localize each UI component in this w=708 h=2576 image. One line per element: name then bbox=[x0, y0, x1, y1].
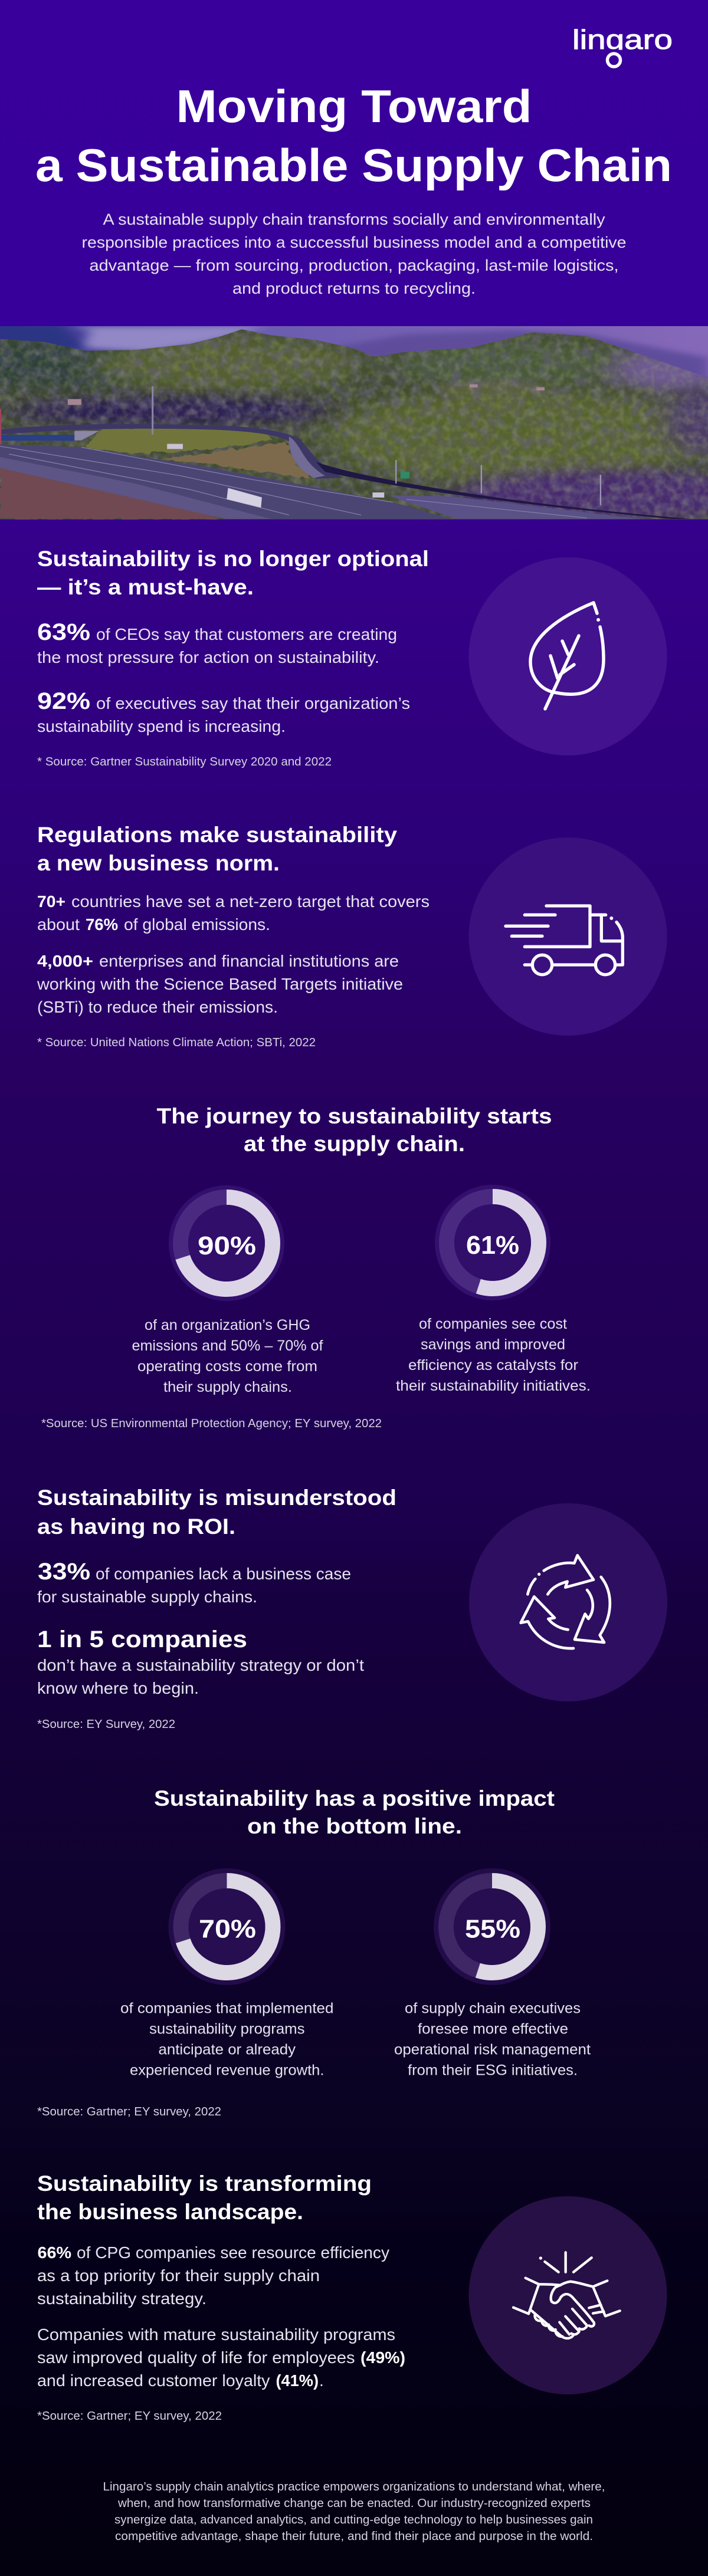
caption: 90%: emissions and 50% – 70% of bbox=[132, 1338, 323, 1354]
footer paragraph: synergize data, advanced analytics, and cutting-edge technology to help businesses gain bbox=[114, 2513, 593, 2526]
intro paragraph: and product returns to recycling. bbox=[232, 280, 476, 297]
stat: 1 in 5 companies: don’t have a sustainability strategy or don’t bbox=[37, 1656, 364, 1674]
panel: the journey starts at the supply chain bbox=[41, 1104, 591, 1430]
icon: delivery truck in circle bbox=[468, 837, 667, 1036]
stat: mature programs: . bbox=[319, 2371, 324, 2390]
caption: 55%: from their ESG initiatives. bbox=[408, 2062, 578, 2078]
stat: 70+ countries: of global emissions. bbox=[124, 915, 270, 934]
logo: lingaro bbox=[572, 24, 673, 67]
stat: 66% of CPG companies: sustainability strategy. bbox=[37, 2289, 206, 2308]
panel: positive impact on the bottom line bbox=[37, 1786, 591, 2118]
stat: 1 in 5 companies: know where to begin. bbox=[37, 1679, 199, 1697]
caption: 61% bbox=[396, 1316, 591, 1394]
footer paragraph bbox=[103, 2480, 605, 2543]
intro paragraph: A sustainable supply chain transforms socially and environmentally bbox=[103, 211, 605, 228]
heading bbox=[157, 1104, 552, 1156]
panel: misunderstood as having no ROI bbox=[37, 1486, 667, 1731]
title bbox=[35, 80, 672, 191]
stat: 4,000+ enterprises: enterprises and financial institutions are bbox=[99, 952, 399, 970]
heading: The journey to sustainability starts bbox=[157, 1104, 552, 1128]
stat: 33% of companies bbox=[37, 1559, 351, 1606]
stat: 4,000+ enterprises bbox=[37, 952, 403, 1016]
source note: * Source: Gartner Sustainability Survey 2020 and 2022 bbox=[37, 755, 332, 768]
heading bbox=[37, 2171, 372, 2224]
heading: — it’s a must-have. bbox=[37, 575, 254, 599]
donut chart: 55% bbox=[434, 1868, 550, 1985]
donut chart: 70%: 70% bbox=[199, 1914, 256, 1944]
stat: 63% of CEOs bbox=[37, 619, 397, 666]
caption: 55% bbox=[394, 2000, 591, 2078]
intro paragraph: responsible practices into a successful business model and a competitive bbox=[81, 234, 627, 251]
heading bbox=[37, 1486, 396, 1539]
source note: *Source: Gartner; EY survey, 2022 bbox=[37, 2410, 222, 2423]
panel: sustainability is a must-have bbox=[37, 547, 667, 768]
stat: 70+ countries bbox=[37, 892, 430, 934]
stat: 92% of executives bbox=[37, 688, 410, 735]
title: a Sustainable Supply Chain bbox=[35, 139, 672, 191]
logo: lingaro: lingaro bbox=[572, 24, 673, 55]
heading: on the bottom line. bbox=[247, 1814, 462, 1838]
footer paragraph: Lingaro’s supply chain analytics practice empowers organizations to understand what, where, bbox=[103, 2480, 605, 2493]
stat: 70+ countries: 70+ bbox=[37, 892, 65, 911]
title: Moving Toward bbox=[176, 80, 532, 132]
stat: mature programs: Companies with mature sustainability programs bbox=[37, 2325, 395, 2344]
icon: recycling arrows in circle bbox=[469, 1503, 667, 1701]
caption: 70%: experienced revenue growth. bbox=[130, 2062, 324, 2078]
caption: 61%: savings and improved bbox=[421, 1336, 565, 1353]
stat: 4,000+ enterprises: (SBTi) to reduce their emissions. bbox=[37, 998, 278, 1016]
stat: 4,000+ enterprises: working with the Science Based Targets initiative bbox=[37, 975, 403, 993]
stat: 66% of CPG companies: as a top priority for their supply chain bbox=[37, 2266, 320, 2285]
stat: mature programs: (49%) bbox=[360, 2348, 405, 2367]
footer paragraph: when, and how transformative change can be enacted. Our industry-recognized experts bbox=[117, 2497, 591, 2510]
footer paragraph: competitive advantage, shape their future, and find their place and purpose in the world. bbox=[115, 2530, 593, 2543]
stat: mature programs: (41%) bbox=[276, 2371, 319, 2390]
caption: 70%: anticipate or already bbox=[158, 2042, 296, 2058]
donut chart: 70% bbox=[169, 1868, 286, 1985]
source note: *Source: Gartner; EY survey, 2022 bbox=[37, 2105, 221, 2118]
source note: *Source: US Environmental Protection Agency; EY survey, 2022 bbox=[41, 1417, 382, 1430]
stat: 70+ countries: about bbox=[37, 915, 80, 934]
heading: Sustainability has a positive impact bbox=[154, 1786, 555, 1811]
heading bbox=[154, 1786, 555, 1838]
stat: 66% of CPG companies: 66% bbox=[38, 2243, 71, 2262]
stat: mature programs: saw improved quality of life for employees bbox=[37, 2348, 355, 2367]
stat: mature programs bbox=[37, 2325, 405, 2390]
panel: transforming the business landscape bbox=[37, 2171, 667, 2423]
photo: highway through forested hills bbox=[0, 324, 708, 521]
caption: 90%: operating costs come from bbox=[137, 1358, 317, 1375]
heading: the business landscape. bbox=[37, 2200, 303, 2224]
intro paragraph bbox=[81, 211, 627, 297]
heading: Sustainability is no longer optional bbox=[37, 547, 429, 571]
icon: leaf in circle bbox=[468, 557, 667, 755]
stat: 92% of executives: of executives say that their organization’s bbox=[96, 694, 410, 712]
panel: regulations bbox=[37, 823, 667, 1049]
stat: 1 in 5 companies bbox=[37, 1627, 364, 1697]
heading: as having no ROI. bbox=[37, 1514, 235, 1539]
caption: 70%: of companies that implemented bbox=[120, 2000, 334, 2017]
stat: 66% of CPG companies bbox=[37, 2243, 389, 2308]
stat: 63% of CEOs: of CEOs say that customers are creating bbox=[96, 625, 397, 643]
stat: 1 in 5 companies: 1 in 5 companies bbox=[37, 1627, 247, 1652]
caption: 70% bbox=[120, 2000, 334, 2078]
stat: 63% of CEOs: the most pressure for action on sustainability. bbox=[37, 648, 379, 666]
source note: *Source: EY Survey, 2022 bbox=[37, 1718, 175, 1731]
heading bbox=[37, 823, 397, 875]
source note: * Source: United Nations Climate Action; SBTi, 2022 bbox=[37, 1036, 316, 1049]
stat: mature programs: and increased customer loyalty bbox=[37, 2371, 270, 2390]
heading: Regulations make sustainability bbox=[37, 823, 397, 847]
caption: 55%: foresee more effective bbox=[418, 2020, 568, 2037]
donut chart: 61%: 61% bbox=[466, 1231, 519, 1260]
caption: 61%: their sustainability initiatives. bbox=[396, 1378, 591, 1394]
stat: 70+ countries: countries have set a net-zero target that covers bbox=[71, 892, 430, 911]
heading: a new business norm. bbox=[37, 851, 280, 875]
donut chart: 90%: 90% bbox=[198, 1231, 256, 1260]
caption: 90%: their supply chains. bbox=[163, 1379, 292, 1395]
stat: 63% of CEOs: 63% bbox=[37, 619, 90, 645]
caption: 55%: operational risk management bbox=[394, 2042, 591, 2058]
heading: Sustainability is transforming bbox=[37, 2171, 372, 2196]
donut chart: 55%: 55% bbox=[465, 1914, 520, 1944]
stat: 4,000+ enterprises: 4,000+ bbox=[37, 952, 93, 970]
stat: 70+ countries: 76% bbox=[86, 915, 118, 934]
caption: 61%: of companies see cost bbox=[419, 1316, 567, 1332]
caption: 90% bbox=[132, 1317, 323, 1395]
caption: 70%: sustainability programs bbox=[149, 2020, 304, 2037]
heading bbox=[37, 547, 429, 599]
donut chart: 61% bbox=[435, 1185, 550, 1300]
stat: 92% of executives: sustainability spend is increasing. bbox=[37, 717, 286, 735]
stat: 33% of companies: for sustainable supply chains. bbox=[37, 1588, 257, 1606]
stat: 33% of companies: of companies lack a business case bbox=[96, 1565, 351, 1583]
stat: 33% of companies: 33% bbox=[38, 1559, 90, 1585]
stat: 92% of executives: 92% bbox=[37, 688, 90, 714]
stat: 66% of CPG companies: of CPG companies see resource efficiency bbox=[77, 2243, 389, 2262]
caption: 61%: efficiency as catalysts for bbox=[408, 1357, 578, 1374]
caption: 55%: of supply chain executives bbox=[405, 2000, 581, 2017]
heading: Sustainability is misunderstood bbox=[37, 1486, 396, 1510]
intro paragraph: advantage — from sourcing, production, packaging, last-mile logistics, bbox=[90, 257, 618, 274]
caption: 90%: of an organization’s GHG bbox=[145, 1317, 310, 1333]
icon: handshake in circle bbox=[468, 2196, 667, 2394]
heading: at the supply chain. bbox=[244, 1132, 465, 1156]
donut chart: 90% bbox=[169, 1185, 284, 1301]
